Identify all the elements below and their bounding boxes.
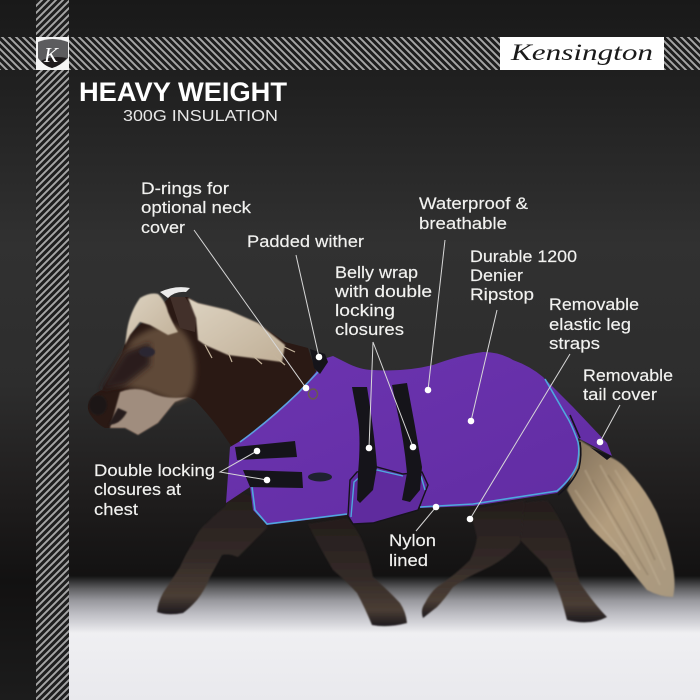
label: D-rings: optional neck — [141, 199, 252, 217]
leader: chest closures — [220, 448, 270, 483]
label: leg straps: Removable — [549, 296, 639, 314]
face — [108, 325, 195, 402]
leader: waterproof — [425, 240, 445, 393]
near foreleg — [308, 518, 407, 626]
label: waterproof: Waterproof & — [419, 195, 528, 213]
label: leg straps: elastic leg — [549, 316, 631, 334]
white tuft — [160, 287, 190, 298]
blue piping, hem — [252, 379, 579, 524]
belly strap right — [392, 383, 422, 502]
chest badge — [308, 472, 332, 482]
label: leg straps: straps — [549, 335, 600, 353]
label: chest closures: closures at — [94, 481, 181, 499]
label: D-rings — [141, 180, 252, 237]
forelock — [125, 294, 178, 345]
leader: D-rings — [194, 230, 309, 391]
muzzle — [110, 389, 188, 435]
nose — [89, 395, 107, 415]
far hind leg — [520, 500, 607, 622]
leader: nylon lined — [416, 504, 439, 531]
label: tail cover: tail cover — [583, 386, 658, 404]
label: leg straps — [549, 296, 639, 353]
horizontal striped band — [0, 37, 700, 70]
belly flap — [348, 467, 428, 524]
label: belly wrap: with double — [334, 283, 432, 301]
D-ring — [308, 389, 318, 399]
ear — [170, 297, 196, 332]
label: waterproof: breathable — [419, 215, 507, 233]
label: padded wither: Padded wither — [247, 233, 365, 251]
label: D-rings: cover — [141, 219, 186, 237]
chest strap top — [235, 441, 297, 460]
purple blanket — [226, 349, 612, 525]
title: HEAVY WEIGHT — [79, 77, 287, 107]
flap piping — [351, 470, 425, 517]
leader: tail cover — [597, 405, 620, 445]
mane — [188, 298, 295, 365]
label: nylon lined: Nylon — [389, 532, 436, 550]
tail — [567, 440, 674, 597]
subtitle: 300G INSULATION — [123, 108, 278, 125]
label: belly wrap: Belly wrap — [335, 264, 418, 282]
blue piping, neck — [240, 372, 318, 442]
black binding, rear — [558, 415, 581, 495]
far foreleg — [157, 490, 267, 614]
pony — [88, 287, 675, 626]
eye — [139, 347, 155, 357]
head and neck — [88, 297, 316, 447]
label: waterproof — [419, 195, 528, 233]
Kensington wordmark: Kensington — [510, 40, 653, 65]
belly strap left — [352, 387, 377, 503]
K shield logo — [36, 37, 69, 70]
vertical striped band — [36, 0, 69, 700]
label: ripstop — [470, 248, 577, 304]
mouth — [108, 408, 127, 425]
snowy ground — [69, 576, 700, 700]
label: nylon lined — [389, 532, 436, 570]
K shield logo: K — [43, 43, 59, 67]
chest strap bottom — [243, 470, 303, 488]
leader: leg straps — [467, 354, 570, 522]
leader: padded wither — [296, 255, 322, 360]
near hind leg — [422, 500, 525, 618]
label: tail cover — [583, 367, 673, 404]
blanket body — [226, 352, 612, 525]
nose bridge shading — [100, 343, 150, 390]
label: tail cover: Removable — [583, 367, 673, 385]
label: chest closures: chest — [94, 501, 138, 519]
label: chest closures — [94, 462, 215, 519]
label: ripstop: Ripstop — [470, 286, 534, 304]
leader: belly wrap — [366, 342, 416, 451]
label: nylon lined: lined — [389, 552, 428, 570]
label: D-rings: D-rings for — [141, 180, 230, 198]
label: belly wrap — [334, 264, 432, 339]
Kensington wordmark — [500, 37, 664, 70]
label: ripstop: Denier — [470, 267, 524, 285]
label: belly wrap: locking — [335, 302, 395, 320]
label: belly wrap: closures — [335, 321, 404, 339]
neck clasp — [310, 349, 328, 374]
leader: ripstop — [468, 310, 497, 424]
label: ripstop: Durable 1200 — [470, 248, 577, 266]
label: chest closures: Double locking — [94, 462, 215, 480]
tail cover tip — [590, 447, 612, 460]
